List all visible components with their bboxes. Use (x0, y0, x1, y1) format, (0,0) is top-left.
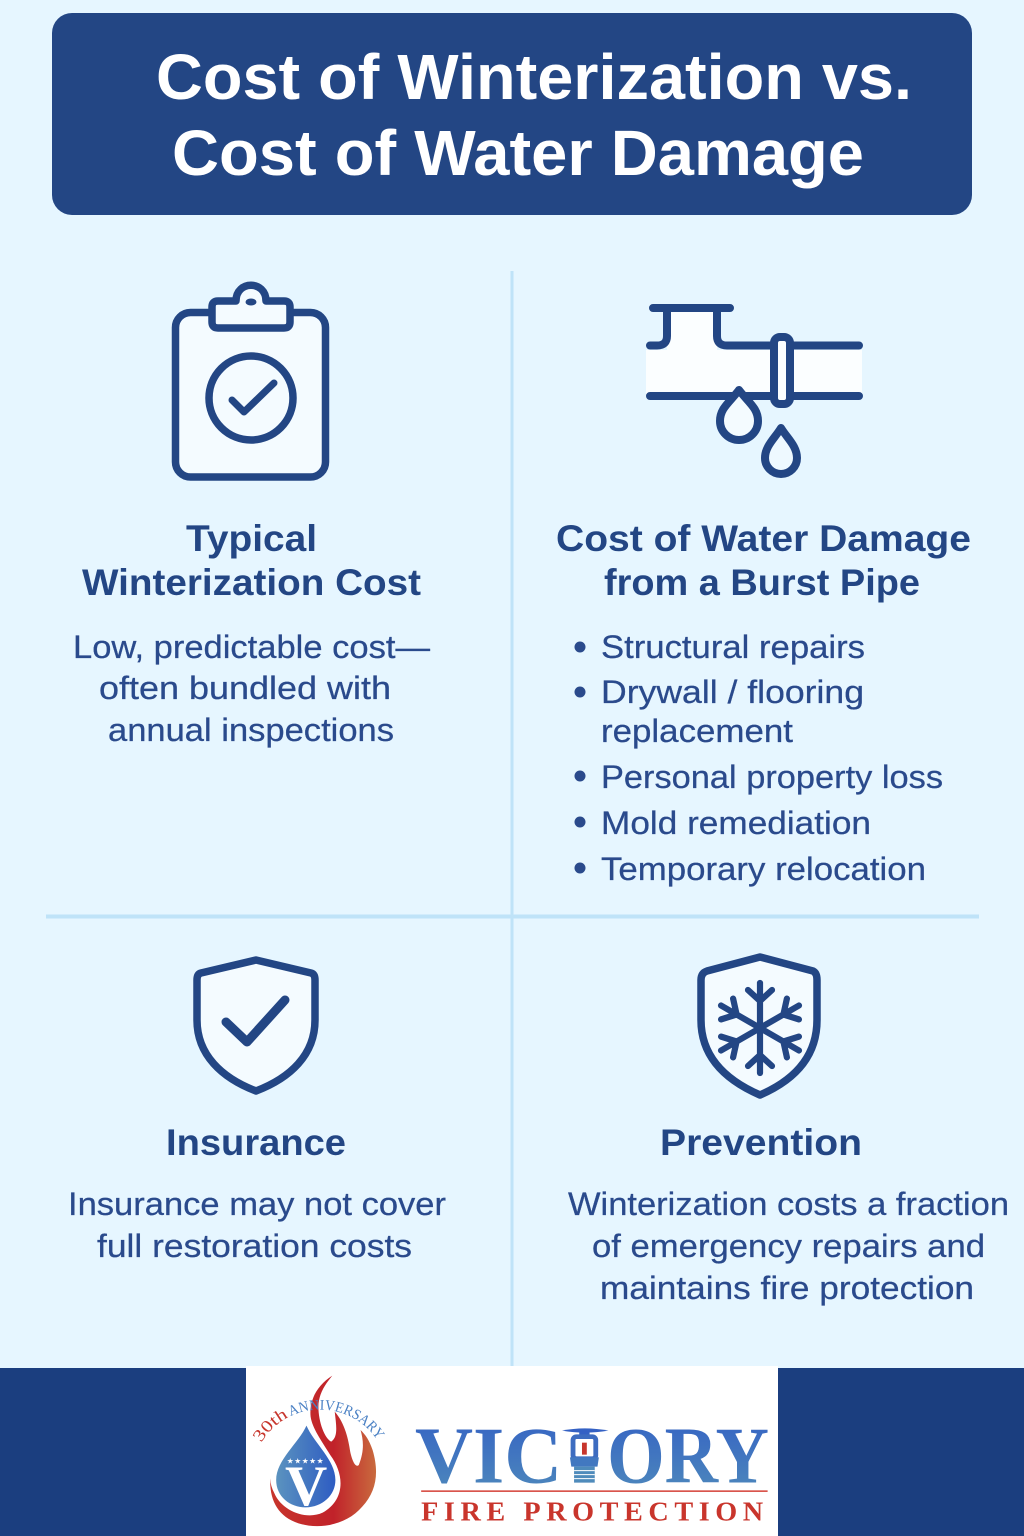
text: prevention description: maintains fire protection (600, 1270, 974, 1306)
footer band (0, 1366, 1024, 1536)
icon: sprinkler head as letter T (562, 1428, 609, 1483)
heading: typical winterization cost: Winterization Cost (82, 562, 421, 603)
text: winterization description: annual inspections (108, 712, 394, 748)
logo wordmark: Fire Protection: FIRE PROTECTION (421, 1497, 763, 1528)
panel: prevention (568, 957, 1009, 1306)
heading: typical winterization cost (82, 518, 421, 603)
logo emblem: flame and water drop (252, 1376, 385, 1526)
logo wordmark: Victory (415, 1412, 769, 1500)
icon: clipboard with check (176, 285, 326, 477)
text: winterization description: Low, predictable cost— (73, 629, 430, 665)
list: damage items (574, 629, 943, 887)
title banner (52, 13, 972, 215)
list: damage items: replacement (601, 713, 793, 749)
text: winterization description: often bundled with (99, 670, 391, 706)
panel: typical winterization cost (73, 285, 430, 748)
list: damage items: Structural repairs (601, 629, 865, 665)
panel: insurance (68, 960, 446, 1264)
text: winterization description (73, 629, 430, 748)
list: damage items: Personal property loss (601, 759, 943, 795)
title banner: Cost of Winterization vs. (156, 41, 912, 113)
logo emblem: flame and water drop: 30th (252, 1411, 288, 1442)
panel: cost of water damage (556, 308, 971, 887)
text: prevention description: of emergency repairs and (592, 1228, 985, 1264)
list: damage items: Drywall / flooring (601, 674, 864, 710)
list: damage items: Mold remediation (601, 805, 871, 841)
title banner: Cost of Water Damage (172, 117, 864, 189)
text: insurance description: Insurance may not cover (68, 1186, 446, 1222)
logo emblem: flame and water drop: ★★★★★ (287, 1457, 324, 1466)
text: prevention description (568, 1186, 1009, 1306)
icon: shield with check (197, 960, 315, 1091)
logo wordmark: Victory: VIC (415, 1412, 562, 1500)
heading: insurance: Insurance (166, 1122, 346, 1163)
list: damage items: Temporary relocation (601, 851, 926, 887)
text: prevention description: Winterization costs a fraction (568, 1186, 1009, 1222)
heading: cost of water damage: Cost of Water Damage (556, 518, 971, 559)
heading: prevention: Prevention (660, 1122, 862, 1163)
heading: cost of water damage: from a Burst Pipe (604, 562, 920, 603)
logo emblem: flame and water drop: V (285, 1456, 327, 1518)
heading: cost of water damage (556, 518, 971, 603)
icon: shield with snowflake (701, 957, 817, 1095)
heading: typical winterization cost: Typical (186, 518, 317, 559)
text: insurance description (68, 1186, 446, 1264)
icon: burst pipe with drops (646, 308, 862, 474)
logo: Victory Fire Protection (252, 1376, 769, 1528)
logo wordmark: Victory: ORY (607, 1412, 769, 1500)
text: insurance description: full restoration costs (97, 1228, 412, 1264)
logo emblem: flame and water drop: ANNIVERSARY (290, 1400, 385, 1438)
